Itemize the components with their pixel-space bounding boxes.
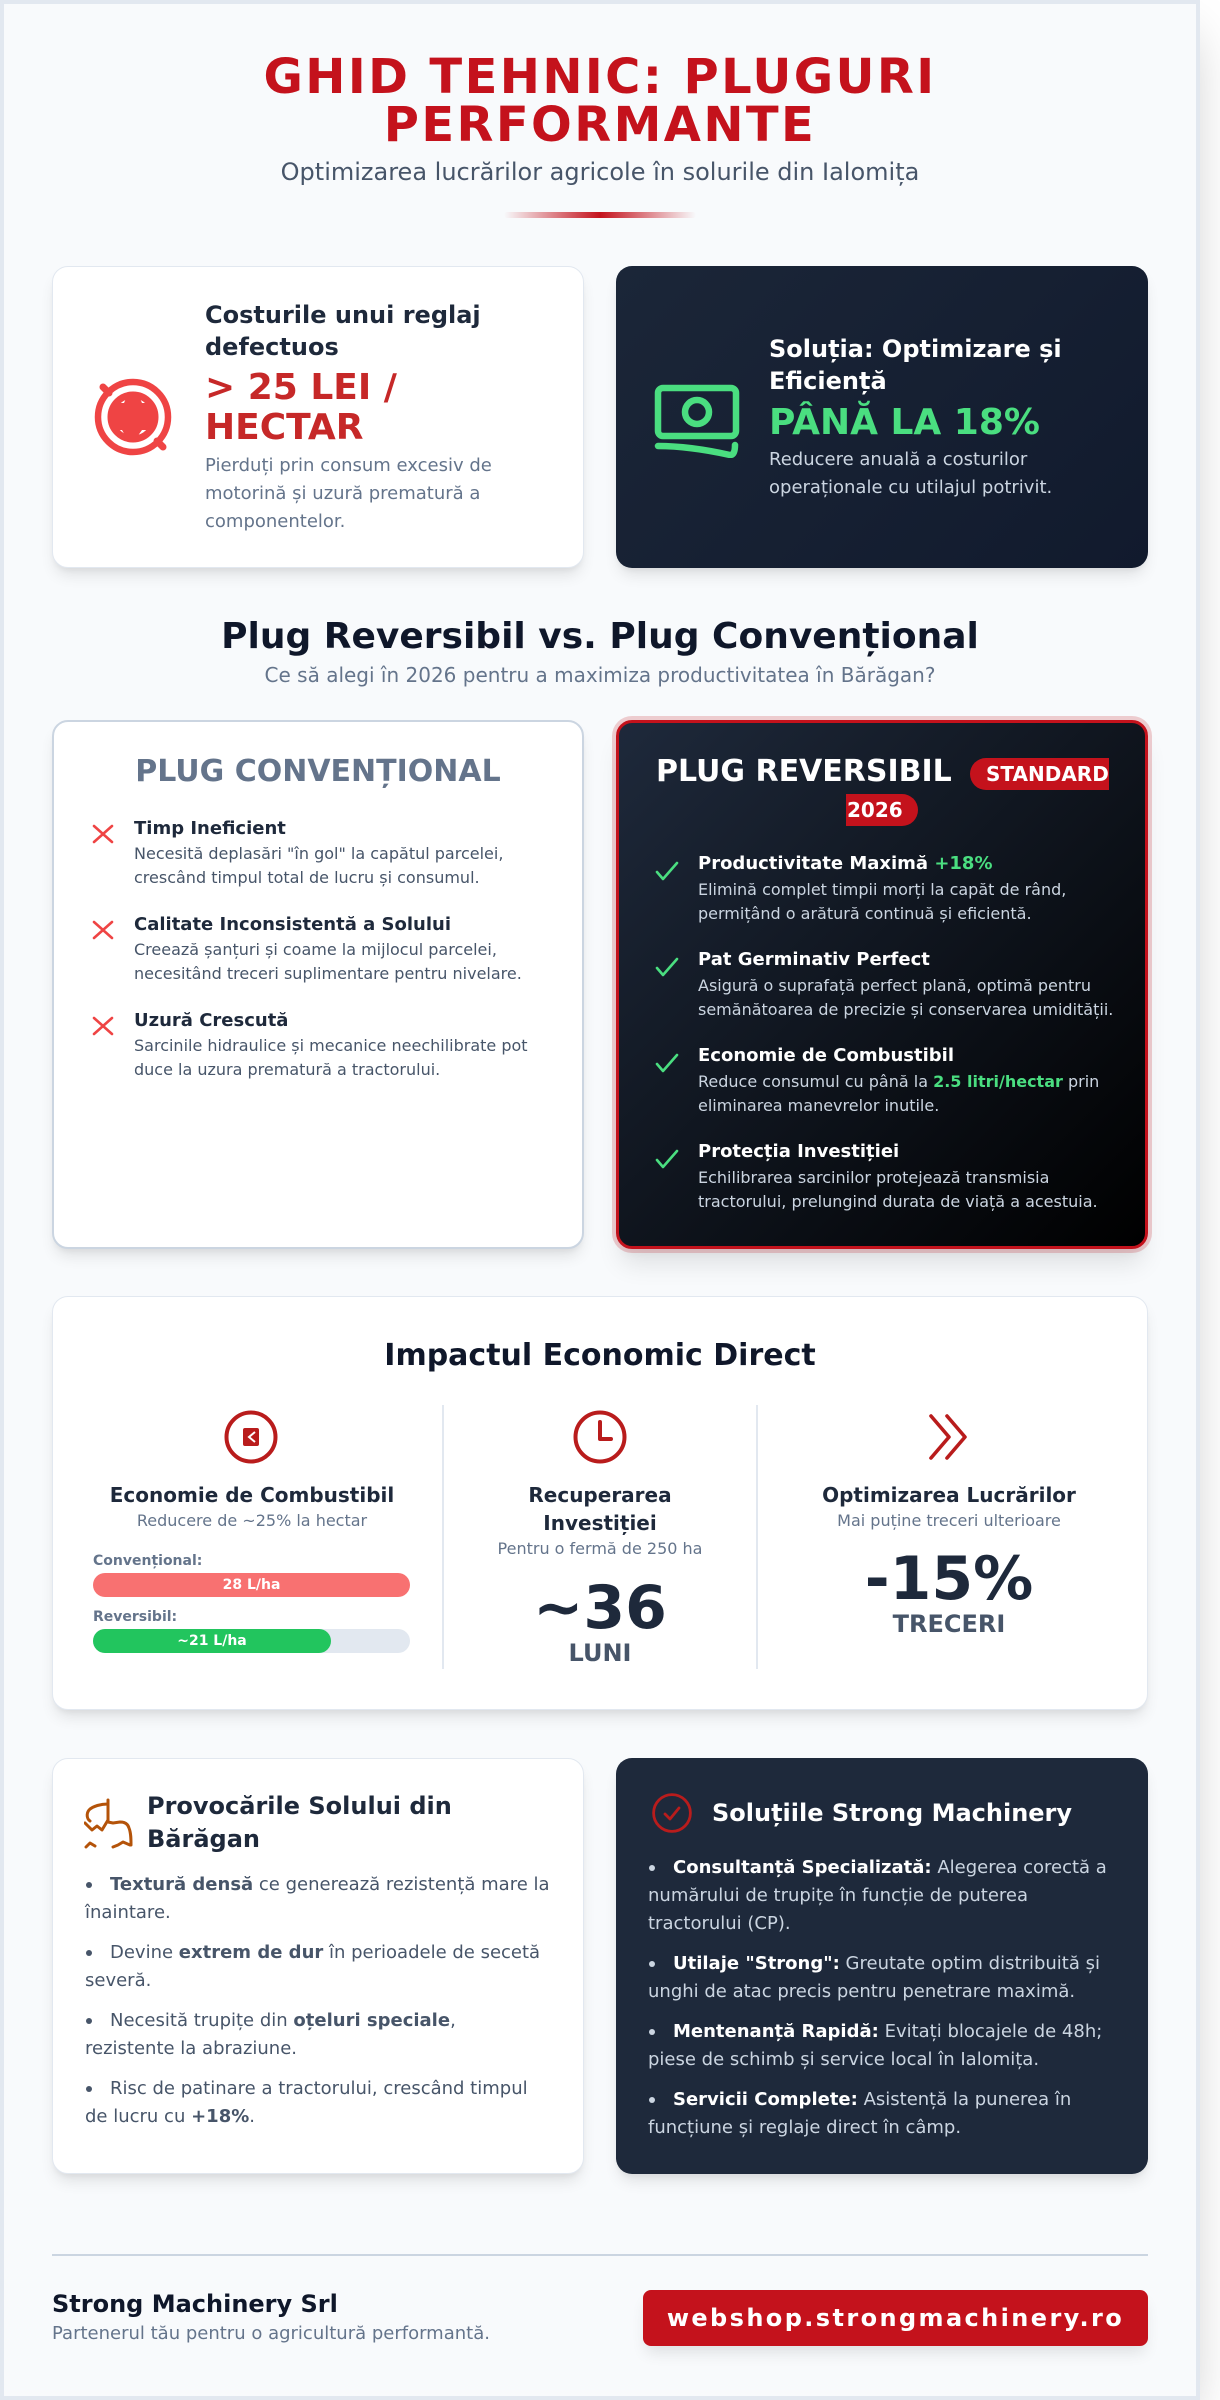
company name: Strong Machinery Srl	[52, 2290, 338, 2318]
title: GHID TEHNIC: PLUGURI	[263, 49, 937, 105]
panel: direct economic impact	[52, 1296, 1148, 1710]
bar: conventional 28 L/ha: 28 L/ha	[223, 1577, 280, 1593]
item: inefficient time	[92, 818, 503, 887]
item: productivity	[656, 853, 1066, 923]
heading: Bărăgan	[147, 1825, 260, 1853]
text: Timp Ineficient	[134, 818, 286, 839]
description	[769, 449, 1052, 498]
heading: Soluția: Optimizare și	[769, 335, 1062, 363]
heading: Impactul Economic Direct	[384, 1338, 816, 1373]
column divider left	[442, 1405, 444, 1669]
panel: reversible plough	[616, 720, 1148, 1249]
bullet: maintenance: piese de schimb și service local în Ialomița.	[648, 2049, 1039, 2070]
column divider right	[756, 1405, 758, 1669]
icon: clock	[574, 1410, 626, 1464]
section subtitle: Ce să alegi în 2026 pentru a maximiza productivitatea în Bărăgan?	[265, 663, 935, 687]
icon: cross	[92, 1016, 114, 1036]
icon: check	[656, 1150, 678, 1168]
subtitle: Optimizarea lucrărilor agricole în solurile din Ialomița	[281, 158, 919, 186]
icon: check	[656, 958, 678, 976]
title: Recuperarea	[528, 1483, 672, 1507]
title: Economie de Combustibil	[110, 1483, 394, 1507]
description: Pierduți prin consum excesiv de	[205, 455, 492, 476]
panel: strong machinery solutions	[616, 1758, 1148, 2174]
panel: conventional plough	[52, 720, 584, 1249]
icon: fuel gauge	[224, 1410, 278, 1464]
bullet: full services: Servicii Complete: Asistență la punerea în	[673, 2089, 1071, 2110]
bar: reversible 21 L/ha: ~21 L/ha	[177, 1633, 247, 1649]
panel: cost of bad adjustment	[52, 266, 584, 568]
item: inconsistent soil quality: necesitând treceri suplimentare pentru nivelare.	[134, 964, 522, 983]
value: -15%	[865, 1544, 1033, 1614]
bullet: hard when dry: severă.	[85, 1970, 151, 1991]
icon: banknote	[654, 384, 740, 458]
icon: cross	[92, 824, 114, 844]
footer	[52, 2254, 1148, 2354]
bullet: maintenance	[648, 2018, 1102, 2074]
badge: standard 2026	[846, 758, 1109, 826]
heading: PLUG CONVENȚIONAL	[135, 754, 501, 789]
bullet: maintenance: Mentenanță Rapidă: Evitați blocajele de 48h;	[673, 2021, 1102, 2042]
stat: cost per hectare: > 25 LEI /	[205, 367, 397, 408]
description: Reducere anuală a costurilor	[769, 449, 1027, 470]
heading: Eficiență	[769, 367, 887, 395]
text: Economie de Combustibil	[698, 1045, 954, 1066]
title	[263, 49, 937, 153]
bullet: slip risk: de lucru cu +18%.	[85, 2106, 255, 2127]
bullet: full services: funcțiune și reglaje direct în câmp.	[648, 2117, 961, 2138]
chart: fuel consumption bars	[93, 1553, 410, 1653]
icon: engine crossed out	[94, 378, 172, 456]
subtitle: Mai puține treceri ulterioare	[837, 1511, 1061, 1530]
stat: savings: PÂNĂ LA 18%	[769, 402, 1040, 443]
unit: LUNI	[569, 1639, 631, 1667]
website button	[643, 2290, 1148, 2346]
stat: cost per hectare	[205, 367, 397, 448]
subtitle: Pentru o fermă de 250 ha	[498, 1539, 702, 1558]
icon: check	[656, 1054, 678, 1072]
text: Protecția Investiției	[698, 1141, 899, 1162]
website button: webshop.strongmachinery.ro	[667, 2304, 1124, 2332]
bullet: dense texture: înaintare.	[85, 1902, 171, 1923]
item: inefficient time: crescând timpul total de lucru și consumul.	[134, 868, 480, 887]
tagline: Partenerul tău pentru o agricultură performantă.	[52, 2323, 490, 2344]
title: Optimizarea Lucrărilor	[822, 1483, 1076, 1507]
text: Productivitate Maximă +18%	[698, 853, 992, 874]
item: productivity: Elimină complet timpii morți la capăt de rând,	[698, 880, 1066, 899]
text: Uzură Crescută	[134, 1010, 288, 1031]
value: ~36	[533, 1573, 667, 1643]
title	[528, 1483, 672, 1535]
item: investment protection	[656, 1141, 1098, 1211]
item: investment protection: Echilibrarea sarcinilor protejează transmisia	[698, 1168, 1049, 1187]
title: Investiției	[543, 1511, 657, 1535]
bar: reversible 21 L/ha	[93, 1629, 410, 1653]
subtitle: Reducere de ~25% la hectar	[137, 1511, 367, 1530]
heading	[205, 301, 481, 361]
item: investment protection: tractorului, prelungind durata de viață a acestuia.	[698, 1192, 1098, 1211]
bullet: hard when dry: Devine extrem de dur în perioadele de secetă	[110, 1942, 540, 1963]
header divider	[504, 212, 696, 218]
heading: PLUG REVERSIBIL	[656, 754, 952, 789]
item: increased wear	[92, 1010, 528, 1079]
description: motorină și uzură prematură a	[205, 483, 480, 504]
icon: check	[656, 862, 678, 880]
heading: Provocările Solului din	[147, 1792, 452, 1820]
bullet: equipment	[648, 1950, 1100, 2006]
heading: Soluțiile Strong Machinery	[712, 1799, 1072, 1827]
list	[647, 1853, 649, 1855]
icon: double chevron	[929, 1414, 967, 1460]
title: PERFORMANTE	[384, 97, 816, 153]
bullet: special steel: Necesită trupițe din oțeluri speciale,	[110, 2010, 456, 2031]
bullet: slip risk	[85, 2078, 528, 2127]
item: inconsistent soil quality	[92, 914, 522, 983]
bullet: dense texture	[84, 1874, 550, 1923]
bullet: special steel: rezistente la abraziune.	[85, 2038, 297, 2059]
column: fuel economy	[93, 1410, 410, 1653]
label: Convențional:	[93, 1553, 202, 1569]
panel: reversible plough: 2026	[847, 798, 903, 822]
description: componentelor.	[205, 511, 345, 532]
bullet: hard when dry	[85, 1942, 540, 1991]
column: payback	[498, 1410, 702, 1667]
icon: check circle	[652, 1793, 692, 1833]
text: Calitate Inconsistentă a Solului	[134, 914, 451, 935]
bar: conventional 28 L/ha	[93, 1573, 410, 1597]
item: fuel economy: eliminarea manevrelor inutile.	[698, 1096, 939, 1115]
item: increased wear: Sarcinile hidraulice și mecanice neechilibrate pot	[134, 1036, 528, 1055]
icon: cross	[92, 920, 114, 940]
item: fuel economy: Reduce consumul cu până la 2.5 litri/hectar prin	[698, 1072, 1099, 1091]
label: Reversibil:	[93, 1609, 177, 1625]
item: seedbed: Asigură o suprafață perfect plană, optimă pentru	[698, 976, 1091, 995]
description	[205, 455, 492, 532]
section heading: comparison: Plug Reversibil vs. Plug Convențional	[221, 616, 979, 657]
item: fuel economy	[656, 1045, 1099, 1115]
bullet: equipment: Utilaje "Strong": Greutate optim distribuită și	[673, 1953, 1100, 1974]
heading: Costurile unui reglaj	[205, 301, 481, 329]
item: inefficient time: Necesită deplasări "în gol" la capătul parcelei,	[134, 844, 503, 863]
bullet: dense texture: Textură densă ce generează rezistență mare la	[110, 1874, 550, 1895]
description: operaționale cu utilajul potrivit.	[769, 477, 1052, 498]
bullet: consultancy: numărului de trupițe în funcție de puterea	[648, 1885, 1028, 1906]
item: productivity: permițând o arătură continuă și eficientă.	[698, 904, 1032, 923]
list	[84, 1874, 550, 2127]
bullet: slip risk: Risc de patinare a tractorului, crescând timpul	[110, 2078, 528, 2099]
badge: standard 2026: STANDARD	[986, 762, 1109, 786]
bullet: consultancy	[648, 1854, 1107, 1938]
bullet: consultancy: Consultanță Specializată: Alegerea corectă a	[673, 1857, 1107, 1878]
heading: defectuos	[205, 333, 339, 361]
bullet: special steel	[85, 2010, 456, 2059]
item: inconsistent soil quality: Creează șanțuri și coame la mijlocul parcelei,	[134, 940, 497, 959]
panel: the solution	[616, 266, 1148, 568]
heading	[769, 335, 1062, 395]
item: seedbed	[656, 949, 1113, 1019]
icon: soil	[84, 1798, 132, 1849]
bullet: full services	[648, 2086, 1071, 2142]
item: increased wear: duce la uzura prematură a tractorului.	[134, 1060, 440, 1079]
bullet: consultancy: tractorului (CP).	[648, 1913, 791, 1934]
stat: cost per hectare: HECTAR	[205, 407, 363, 448]
text: Pat Germinativ Perfect	[698, 949, 930, 970]
header	[263, 49, 937, 218]
item: seedbed: semănătoarea de precizie și conservarea umidității.	[698, 1000, 1113, 1019]
panel: soil challenges	[52, 1758, 584, 2174]
unit: TRECERI	[893, 1610, 1005, 1638]
column: work optimisation	[822, 1414, 1076, 1638]
heading	[147, 1792, 452, 1853]
bullet: equipment: unghi de atac precis pentru penetrare maximă.	[648, 1981, 1075, 2002]
